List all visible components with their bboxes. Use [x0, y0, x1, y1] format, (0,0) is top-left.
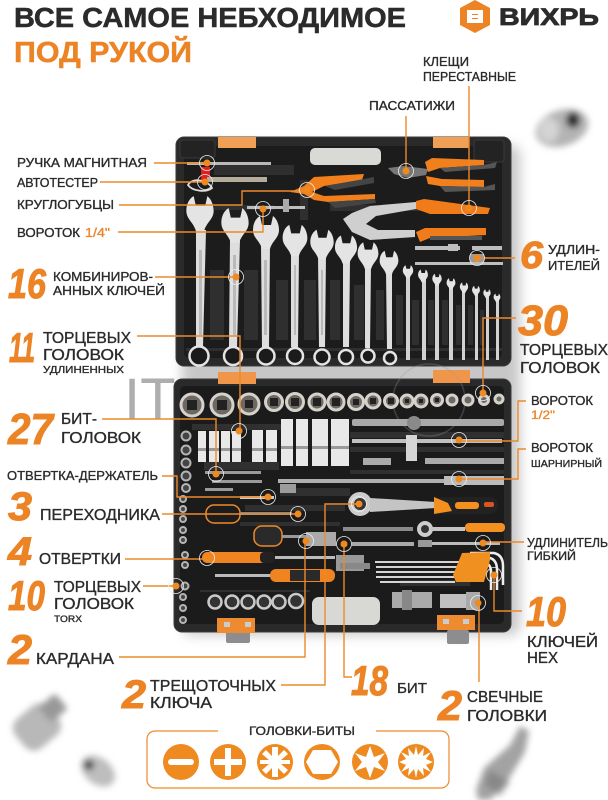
label: 10 ключей hex: HEX	[527, 650, 559, 667]
tools: torx sockets row	[208, 594, 303, 608]
blurred bit socket bottom right	[476, 726, 529, 800]
logo: Вихрь	[460, 0, 599, 33]
legend heading: ГОЛОВКИ-БИТЫ	[249, 726, 355, 738]
tools: left sockets column	[180, 432, 190, 623]
tools: spark plug sockets	[392, 590, 480, 610]
label: вороток шарнирный	[531, 440, 602, 470]
label: 2 свечные головки	[437, 682, 547, 729]
panel: tool case top half	[176, 137, 511, 366]
label: 11 торцевых головок удлиненных: УДЛИНЕННЫХ	[43, 365, 124, 376]
label: ручка магнитная: РУЧКА МАГНИТНАЯ	[17, 156, 147, 170]
label: вороток 1/4: 1/4"	[85, 226, 110, 240]
panel: tool case bottom half	[174, 379, 511, 632]
title: main heading: ПОД РУКОЙ	[14, 35, 192, 69]
label: 3 переходника	[8, 485, 160, 529]
label: 6 удлинителей	[520, 235, 600, 277]
label: клещи переставные: ПЕРЕСТАВНЫЕ	[423, 70, 516, 84]
label: 6 удлинителей: УДЛИН-	[548, 242, 600, 257]
label: вороток 1/4	[17, 226, 110, 240]
label: 3 переходника: 3	[8, 485, 32, 529]
label: 18 бит	[351, 657, 427, 704]
label: 16 комбинированных ключей: КОМБИНИРОВ-	[53, 269, 153, 284]
label: 10 ключей hex: 10	[526, 588, 566, 635]
label: удлинитель гибкий: ГИБКИЙ	[527, 550, 576, 563]
tools: flex extension	[418, 540, 500, 547]
label: 10 торцевых головок torx: 10	[8, 572, 45, 619]
label: 3 переходника: ПЕРЕХОДНИКА	[40, 507, 160, 524]
label: 27 бит-головок: ГОЛОВОК	[61, 430, 142, 447]
label: пассатижи: ПАССАТИЖИ	[369, 99, 455, 113]
label: 30 торцевых головок: ГОЛОВОК	[520, 360, 601, 377]
tools: big ratchet	[348, 492, 498, 516]
label: 30 торцевых головок	[518, 297, 608, 377]
clips top	[218, 137, 469, 148]
tools: small ratchet	[417, 521, 505, 537]
latches bottom	[217, 615, 475, 644]
label: 18 бит: 18	[351, 657, 389, 704]
tools: bits set	[205, 471, 414, 546]
tools: screwdrivers	[202, 505, 335, 582]
label: 11 торцевых головок удлиненных: ТОРЦЕВЫХ	[43, 330, 131, 347]
tools: 8 small combination wrenches	[403, 265, 500, 360]
label: 27 бит-головок: БИТ-	[61, 411, 97, 428]
label: 10 торцевых головок torx: ГОЛОВОК	[54, 596, 135, 613]
label: 2 свечные головки: 2	[437, 682, 462, 729]
tools: ratchet socket handles and bars	[240, 416, 504, 499]
icon: six-point star	[352, 744, 388, 780]
case drop shadow	[182, 145, 520, 635]
label: 16 комбинированных ключей	[8, 260, 165, 307]
icon: phillips	[210, 744, 246, 780]
callout lines	[100, 86, 526, 685]
label: 2 свечные головки: СВЕЧНЫЕ	[467, 689, 543, 706]
logo: Вихрь: ВИХРЬ	[499, 4, 599, 31]
hinges orange	[218, 370, 470, 384]
tools: magnetic handle and autotester	[187, 162, 271, 191]
tools: 11 long sockets	[198, 419, 349, 466]
label: удлинитель гибкий	[527, 536, 608, 563]
callout markers	[168, 156, 502, 610]
tools: wire cutters / round nose pliers	[247, 174, 376, 212]
tools: extensions	[415, 244, 503, 265]
label: клещи переставные	[423, 55, 516, 84]
label: 16 комбинированных ключей: АННЫХ КЛЮЧЕЙ	[53, 283, 165, 298]
title: main heading	[14, 2, 406, 69]
watermark	[124, 364, 465, 436]
icon: pozidriv star	[257, 744, 293, 780]
label: удлинитель гибкий: УДЛИНИТЕЛЬ	[527, 536, 608, 550]
label: 2 трещоточных ключа	[121, 673, 277, 717]
title: main heading: ВСЕ САМОЕ НЕБХОДИМОЕ	[14, 2, 406, 33]
icon: hex	[304, 744, 340, 780]
tools: kardan joints	[306, 532, 370, 571]
blurred adapter bottom left	[8, 693, 68, 756]
label: 27 бит-головок: 27	[7, 405, 55, 454]
tools: combination pliers	[388, 158, 497, 192]
label: 10 ключей hex: КЛЮЧЕЙ	[527, 633, 598, 651]
label: 6 удлинителей: 6	[520, 235, 544, 277]
label: 2 трещоточных ключа: КЛЮЧА	[150, 695, 213, 712]
label: 4 отвертки	[7, 530, 121, 574]
label: 11 торцевых головок удлиненных: 11	[9, 324, 35, 371]
label: 2 трещоточных ключа: ТРЕЩОТОЧНЫХ	[150, 678, 277, 695]
label: вороток 1/4: ВОРОТОК	[17, 226, 81, 240]
label: вороток 1/2	[531, 393, 593, 422]
label: 10 торцевых головок torx: ТОРЦЕВЫХ	[54, 579, 141, 596]
label: 4 отвертки: ОТВЕРТКИ	[39, 551, 121, 568]
label: 11 торцевых головок удлиненных: ГОЛОВОК	[43, 347, 125, 364]
tools: water pump pliers	[343, 199, 490, 242]
label: клещи переставные: КЛЕЩИ	[423, 55, 469, 69]
label: отвертка-держатель: ОТВЕРТКА-ДЕРЖАТЕЛЬ	[7, 469, 158, 483]
label: вороток шарнирный: ВОРОТОК	[531, 440, 593, 455]
label: 27 бит-головок	[7, 405, 142, 454]
label: 2 трещоточных ключа: 2	[121, 673, 146, 717]
label: круглогубцы: КРУГЛОГУБЦЫ	[17, 198, 114, 212]
label: вороток 1/2: 1/2"	[531, 408, 555, 422]
label: 18 бит: БИТ	[397, 680, 427, 697]
label: 2 кардана: КАРДАНА	[36, 651, 115, 668]
label: 30 торцевых головок: ТОРЦЕВЫХ	[520, 342, 608, 359]
tools: hex keys	[375, 552, 503, 590]
blurred socket bottom	[75, 749, 121, 793]
label: 2 кардана: 2	[7, 626, 32, 673]
label: 4 отвертки: 4	[7, 530, 32, 574]
label: 10 торцевых головок torx: TORX	[54, 614, 83, 625]
handle opening top	[310, 148, 381, 165]
label: 6 удлинителей: ИТЕЛЕЙ	[548, 258, 600, 273]
label: 10 торцевых головок torx	[8, 572, 141, 625]
icon: spline	[398, 744, 434, 780]
label: 11 торцевых головок удлиненных	[9, 324, 131, 376]
panel: bit heads legend	[147, 726, 449, 788]
tools: sockets row	[181, 394, 503, 416]
label: автотестер: АВТОТЕСТЕР	[17, 176, 98, 190]
label: 10 ключей hex	[526, 588, 598, 667]
blurred socket top right	[531, 103, 593, 153]
label: 2 свечные головки: ГОЛОВКИ	[467, 708, 547, 725]
tools: 8 large combination wrenches	[186, 196, 398, 366]
label: вороток шарнирный: ШАРНИРНЫЙ	[531, 457, 602, 470]
watermark: IT	[124, 367, 176, 432]
label: 16 комбинированных ключей: 16	[8, 260, 47, 307]
label: 30 торцевых головок: 30	[518, 297, 568, 345]
icon: slotted	[163, 744, 199, 780]
label: 2 кардана	[7, 626, 115, 673]
label: вороток 1/2: ВОРОТОК	[531, 393, 593, 408]
